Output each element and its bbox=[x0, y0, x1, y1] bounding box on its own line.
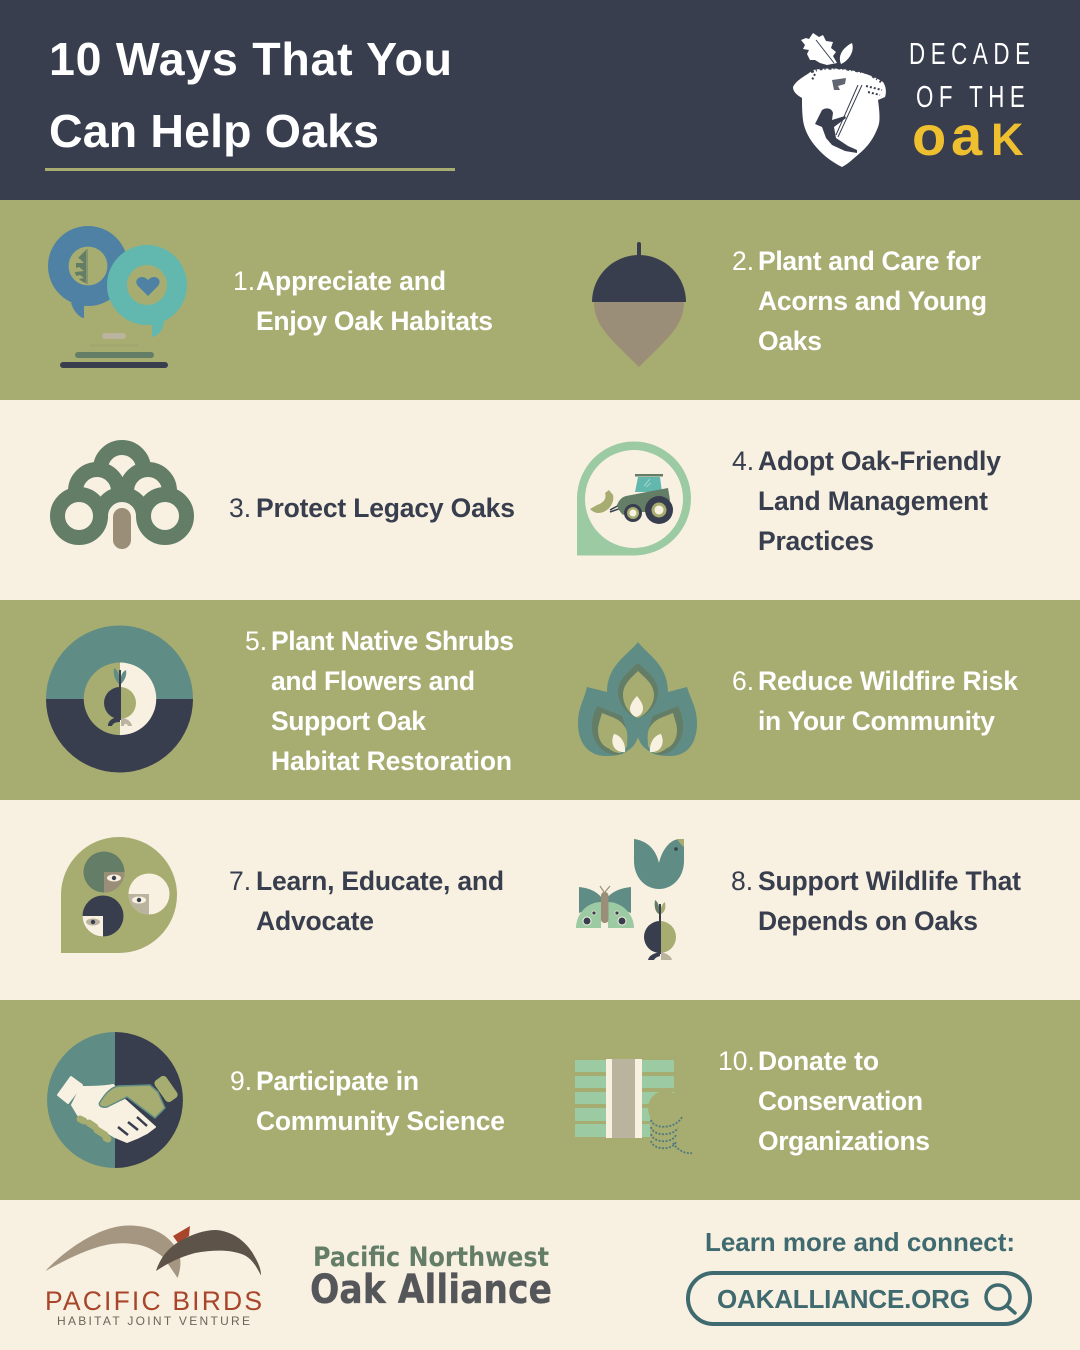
item 1 bbox=[58, 236, 493, 368]
panel: footer bbox=[0, 1200, 1080, 1350]
panel: row 5 bbox=[0, 1000, 1080, 1200]
text: OF THE: OF THE bbox=[916, 79, 1025, 114]
text: item 1 bbox=[233, 266, 493, 336]
text: item 6: 6. bbox=[732, 666, 754, 696]
text: item 5: 5. bbox=[245, 626, 267, 656]
text: item 7: 7. bbox=[229, 866, 251, 896]
icon: bulb in circle bbox=[46, 626, 193, 772]
panel: row 2 bbox=[0, 400, 1080, 600]
item 2 bbox=[592, 242, 987, 367]
text: item 7: Advocate bbox=[256, 906, 374, 936]
text: item 5: Support Oak bbox=[271, 706, 426, 736]
panel: row 3 bbox=[0, 600, 1080, 800]
text: item 9: Community Science bbox=[256, 1106, 505, 1136]
logo: Pacific Birds bbox=[45, 1225, 262, 1328]
title bbox=[45, 33, 455, 171]
text: item 4: Practices bbox=[758, 526, 874, 556]
icon: acorn with girl on swing bbox=[793, 33, 886, 167]
logo: Decade of the Oak bbox=[793, 33, 1030, 167]
text: item 7 bbox=[229, 866, 504, 936]
item 3 bbox=[58, 448, 515, 552]
text: item 4: Land Management bbox=[758, 486, 988, 516]
icon: acorn bbox=[592, 242, 686, 367]
item 8 bbox=[576, 839, 1021, 960]
icon: butterfly bbox=[576, 886, 634, 928]
text: item 8: Depends on Oaks bbox=[758, 906, 978, 936]
text: item 3: 3. bbox=[229, 493, 251, 523]
text: item 8 bbox=[731, 866, 1021, 936]
text: item 7: Learn, Educate, and bbox=[256, 866, 504, 896]
text: website: OAKALLIANCE.ORG bbox=[717, 1284, 970, 1314]
text: item 10: Conservation bbox=[758, 1086, 923, 1116]
panel: header bbox=[0, 0, 1080, 200]
text: item 10 bbox=[718, 1046, 930, 1156]
link pill bbox=[688, 1273, 1030, 1324]
panel: row 4 bbox=[0, 800, 1080, 1000]
icon: search bbox=[986, 1285, 1015, 1313]
text: Pacific Birds: PACIFIC BIRDS bbox=[45, 1286, 262, 1316]
text: oak: a bbox=[951, 104, 983, 167]
icon: wildlife bbox=[576, 839, 684, 960]
text: item 9: 9. bbox=[230, 1066, 252, 1096]
text: item 6: in Your Community bbox=[758, 706, 995, 736]
text: item 4: Adopt Oak-Friendly bbox=[758, 446, 1001, 476]
icon: tractor bbox=[577, 441, 691, 556]
text: item 1: Enjoy Oak Habitats bbox=[256, 306, 493, 336]
icon: three faces bbox=[61, 837, 177, 953]
icon: legacy oak tree bbox=[58, 448, 186, 552]
text: item 6: Reduce Wildfire Risk bbox=[758, 666, 1018, 696]
text: item 8: 8. bbox=[731, 866, 753, 896]
text: item 2 bbox=[732, 246, 987, 356]
icon: bird bbox=[634, 839, 684, 889]
text: item 4: 4. bbox=[732, 446, 754, 476]
title: Can Help Oaks bbox=[49, 105, 379, 157]
logo: Pacific Northwest Oak Alliance: Oak Alliance bbox=[310, 1267, 552, 1313]
item 6 bbox=[578, 642, 1018, 756]
text: item 5: and Flowers and bbox=[271, 666, 475, 696]
text: item 10: Organizations bbox=[758, 1126, 930, 1156]
item 10 bbox=[575, 1046, 930, 1156]
icon: flame leaves bbox=[578, 642, 697, 756]
item 5 bbox=[46, 626, 514, 776]
text: item 9: Participate in bbox=[256, 1066, 419, 1096]
text: item 1: 1. bbox=[233, 266, 255, 296]
text: item 3: Protect Legacy Oaks bbox=[256, 493, 515, 523]
text: item 9 bbox=[230, 1066, 505, 1136]
text: item 4 bbox=[732, 446, 1001, 556]
text: item 2: Acorns and Young bbox=[758, 286, 987, 316]
text: DECADE: DECADE bbox=[909, 36, 1030, 71]
icon: birds bbox=[46, 1225, 261, 1278]
text: item 2: Plant and Care for bbox=[758, 246, 981, 276]
logo: Pacific Northwest Oak Alliance: Pacific Northwest bbox=[313, 1242, 549, 1273]
logo: Pacific Northwest Oak Alliance bbox=[310, 1242, 552, 1313]
title: 10 Ways That You bbox=[49, 33, 452, 85]
text: item 2: 2. bbox=[732, 246, 754, 276]
callout: learn more bbox=[688, 1227, 1030, 1324]
text: item 5: Habitat Restoration bbox=[271, 746, 512, 776]
text: item 2: Oaks bbox=[758, 326, 822, 356]
text: item 5: Plant Native Shrubs bbox=[271, 626, 514, 656]
item 4 bbox=[577, 441, 1001, 556]
text: item 10: 10. bbox=[718, 1046, 755, 1076]
panel: row 1 bbox=[0, 200, 1080, 400]
text: learn more and connect: Learn more and connect: bbox=[705, 1227, 1015, 1257]
text: Habitat Joint Venture: HABITAT JOINT VENTURE bbox=[57, 1314, 250, 1328]
text: oak: K bbox=[991, 114, 1024, 165]
text: oak: o bbox=[912, 104, 946, 167]
text: item 10: Donate to bbox=[758, 1046, 879, 1076]
text: item 6 bbox=[732, 666, 1018, 736]
text: item 1: Appreciate and bbox=[256, 266, 446, 296]
item 9 bbox=[47, 1032, 505, 1168]
icon: speech bubbles bbox=[58, 236, 177, 368]
text: item 8: Support Wildlife That bbox=[758, 866, 1021, 896]
text: item 5 bbox=[245, 626, 514, 776]
item 7 bbox=[61, 837, 504, 953]
icon: bulb bbox=[644, 900, 676, 960]
icon: money and coins bbox=[575, 1059, 692, 1153]
icon: handshake bbox=[47, 1032, 183, 1168]
